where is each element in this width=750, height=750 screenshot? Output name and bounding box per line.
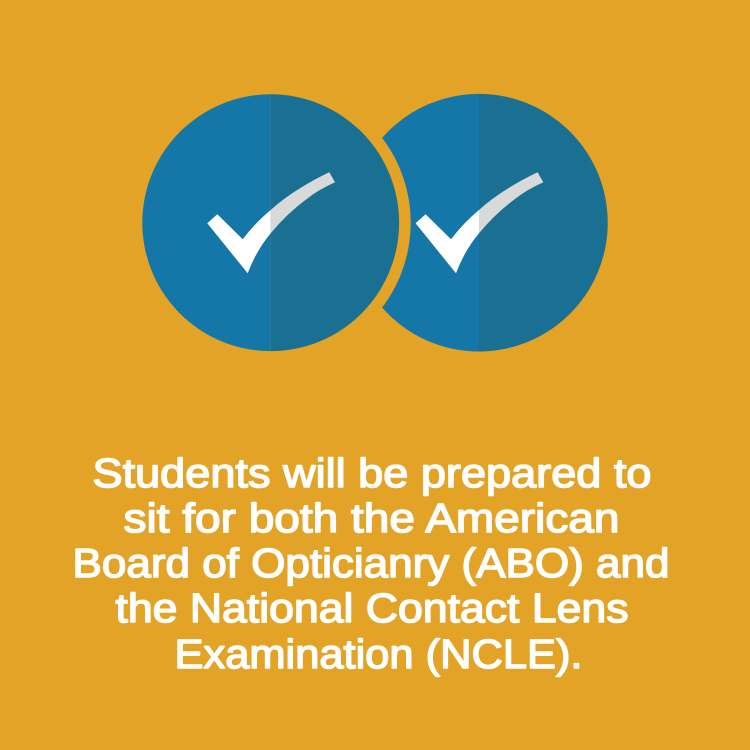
icon: right check mark — [416, 172, 543, 273]
caption text: Examination (NCLE). — [174, 631, 582, 677]
caption text: Students will be prepared to — [92, 450, 652, 496]
caption text: the National Contact Lens — [116, 585, 628, 631]
caption text: sit for both the American — [124, 495, 620, 541]
icon: left check badge — [142, 94, 399, 351]
caption text: Board of Opticianry (ABO) and — [72, 540, 670, 586]
caption text — [72, 450, 670, 677]
icon: left check mark — [207, 172, 335, 273]
icon: right check badge — [382, 94, 608, 352]
